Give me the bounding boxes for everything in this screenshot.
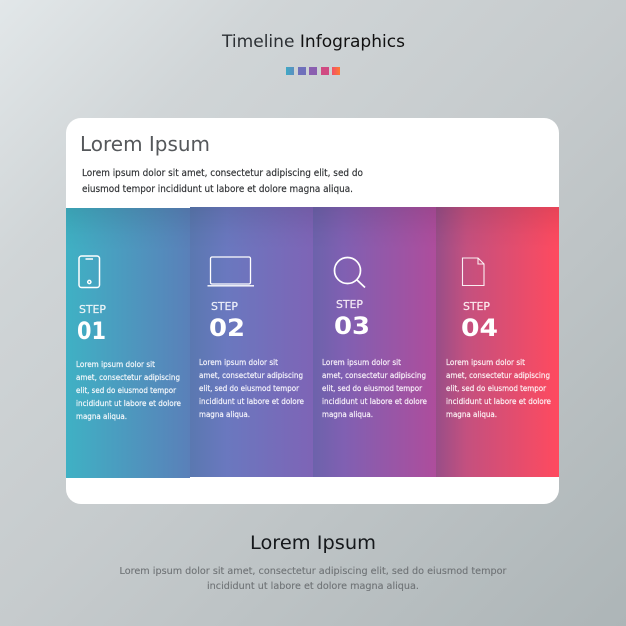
step 4 text: Lorem ipsum dolor sit	[446, 358, 525, 367]
step 3 text: incididunt ut labore et dolore	[322, 397, 427, 406]
step 4 label: STEP	[463, 301, 490, 313]
panel intro text: Lorem ipsum dolor sit amet, consectetur adipiscing elit, sed do	[82, 168, 363, 179]
title: Timeline Infographics	[221, 32, 405, 52]
step 2 text: Lorem ipsum dolor sit	[199, 358, 278, 367]
step 2 text: elit, sed do eiusmod tempor	[199, 384, 300, 393]
step 1 number: 01	[77, 317, 106, 345]
colour swatches	[286, 67, 340, 75]
step 1 label: STEP	[79, 304, 106, 316]
step 2 number: 02	[209, 314, 245, 342]
icon: magnifier	[334, 258, 365, 288]
step 1 text: Lorem ipsum dolor sit	[76, 360, 155, 369]
icon: phone	[79, 256, 100, 288]
step 4 text: amet, consectetur adipiscing	[446, 371, 550, 380]
footer heading: Lorem Ipsum	[250, 532, 376, 554]
step 1 text: elit, sed do eiusmod tempor	[76, 386, 177, 395]
step 1 column	[66, 208, 190, 478]
step 2 label: STEP	[211, 301, 238, 313]
step 3 text: magna aliqua.	[322, 410, 373, 419]
step 4 text: magna aliqua.	[446, 410, 497, 419]
step 2 text: amet, consectetur adipiscing	[199, 371, 303, 380]
icon: laptop	[208, 257, 254, 286]
step 4 text: elit, sed do eiusmod tempor	[446, 384, 547, 393]
panel: main card	[66, 118, 559, 504]
footer text	[120, 566, 507, 592]
step 4 number: 04	[461, 314, 498, 342]
step 1 text: amet, consectetur adipiscing	[76, 373, 180, 382]
step 1 text	[76, 360, 181, 421]
icon: document	[462, 258, 484, 286]
step 3 text	[322, 358, 427, 419]
step 3 text: Lorem ipsum dolor sit	[322, 358, 401, 367]
step 4 text	[446, 358, 551, 419]
step 1 text: incididunt ut labore et dolore	[76, 399, 181, 408]
step 3 text: elit, sed do eiusmod tempor	[322, 384, 423, 393]
footer text: incididunt ut labore et dolore magna aliqua.	[207, 581, 419, 592]
step 2 text: incididunt ut labore et dolore	[199, 397, 304, 406]
panel intro text	[82, 168, 363, 195]
step 4 text: incididunt ut labore et dolore	[446, 397, 551, 406]
step 3 column	[313, 207, 436, 477]
footer text: Lorem ipsum dolor sit amet, consectetur adipiscing elit, sed do eiusmod tempor	[120, 566, 507, 577]
step 2 text: magna aliqua.	[199, 410, 250, 419]
step 3 label: STEP	[336, 299, 363, 311]
panel intro text: eiusmod tempor incididunt ut labore et dolore magna aliqua.	[82, 184, 353, 195]
panel heading: Lorem Ipsum	[80, 132, 210, 156]
step 3 number: 03	[334, 312, 370, 340]
step 4 column	[436, 207, 559, 477]
step 1 text: magna aliqua.	[76, 412, 127, 421]
step 2 column	[190, 207, 313, 477]
step 2 text	[199, 358, 304, 419]
step 3 text: amet, consectetur adipiscing	[322, 371, 426, 380]
